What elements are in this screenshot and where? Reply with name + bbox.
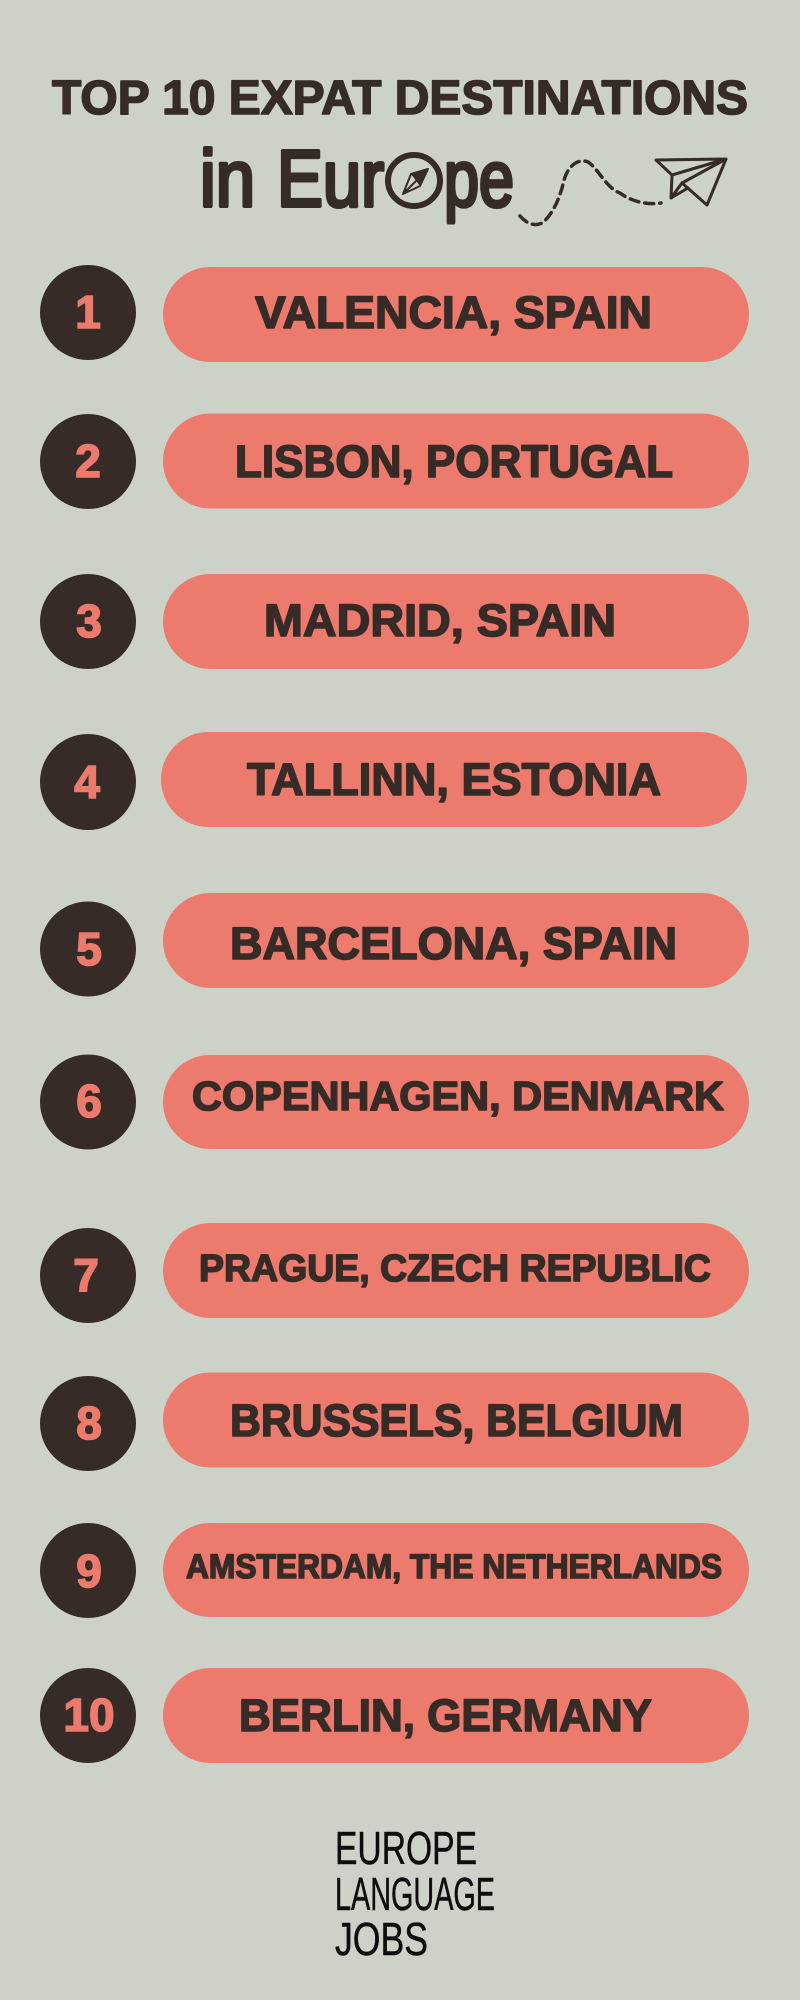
pill: Barcelona, Spain: BARCELONA, SPAIN	[230, 918, 677, 969]
footer logo: Europe Language Jobs	[335, 1822, 495, 1965]
row 10	[40, 1668, 749, 1763]
row 3	[40, 574, 749, 669]
subtitle: in Europe	[200, 134, 514, 223]
pill: Valencia, Spain: VALENCIA, SPAIN	[255, 287, 652, 338]
pill: Lisbon, Portugal	[163, 414, 749, 508]
number badge 2: 2	[75, 435, 101, 487]
number badge 3: 3	[76, 595, 102, 647]
number badge 2	[40, 414, 136, 509]
pill: Lisbon, Portugal: LISBON, PORTUGAL	[235, 436, 673, 487]
number badge 9: 9	[76, 1545, 102, 1597]
pill: Brussels, Belgium	[163, 1372, 749, 1468]
pill: Barcelona, Spain	[163, 893, 749, 988]
footer logo: Europe Language Jobs: LANGUAGE	[335, 1868, 495, 1920]
row 4	[40, 732, 747, 830]
row 8	[40, 1372, 749, 1471]
dashed flight path	[520, 161, 661, 225]
number badge 6	[40, 1054, 136, 1150]
number badge 1: 1	[75, 286, 101, 338]
subtitle: in Europe: in	[200, 134, 255, 223]
row 7	[40, 1223, 749, 1323]
pill: Tallinn, Estonia: TALLINN, ESTONIA	[247, 754, 661, 805]
subtitle: in Europe: pe	[444, 134, 514, 223]
row 9	[40, 1523, 749, 1618]
number badge 5	[40, 902, 136, 996]
number badge 6: 6	[76, 1075, 102, 1127]
row 2	[40, 414, 749, 509]
pill: Prague, Czech Republic	[163, 1223, 749, 1318]
number badge 8: 8	[76, 1397, 102, 1449]
number badge 3	[40, 574, 136, 669]
icon: paper plane	[656, 159, 726, 205]
pill: Berlin, Germany: BERLIN, GERMANY	[239, 1690, 652, 1741]
footer logo: Europe Language Jobs: JOBS	[335, 1913, 428, 1965]
pill: Copenhagen, Denmark: COPENHAGEN, DENMARK	[192, 1073, 724, 1119]
icon: compass letter O	[388, 155, 440, 206]
pill: Amsterdam, The Netherlands: AMSTERDAM, THE NETHERLANDS	[186, 1548, 722, 1586]
row 1	[40, 265, 749, 362]
pill: Madrid, Spain: MADRID, SPAIN	[264, 595, 616, 646]
number badge 5: 5	[76, 923, 102, 975]
subtitle: in Europe: Eur	[277, 134, 384, 223]
number badge 10	[40, 1668, 136, 1763]
pill: Madrid, Spain	[163, 574, 749, 669]
pill: Copenhagen, Denmark	[163, 1055, 749, 1149]
number badge 4	[40, 734, 136, 830]
title: TOP 10 EXPAT DESTINATIONS	[52, 72, 748, 125]
pill: Brussels, Belgium: BRUSSELS, BELGIUM	[230, 1395, 683, 1446]
number badge 10: 10	[63, 1689, 115, 1741]
number badge 9	[40, 1523, 136, 1618]
footer logo: Europe Language Jobs: EUROPE	[335, 1822, 477, 1874]
pill: Tallinn, Estonia	[161, 732, 747, 827]
number badge 7	[40, 1228, 136, 1323]
row 6	[40, 1054, 749, 1150]
pill: Berlin, Germany	[163, 1668, 749, 1763]
number badge 7: 7	[73, 1249, 99, 1301]
pill: Prague, Czech Republic: PRAGUE, CZECH REPUBLIC	[199, 1248, 711, 1290]
pill: Amsterdam, The Netherlands	[163, 1523, 749, 1617]
number badge 1	[40, 265, 136, 360]
pill: Valencia, Spain	[163, 267, 749, 362]
number badge 4: 4	[74, 756, 100, 808]
row 5	[40, 893, 749, 996]
number badge 8	[40, 1376, 136, 1471]
